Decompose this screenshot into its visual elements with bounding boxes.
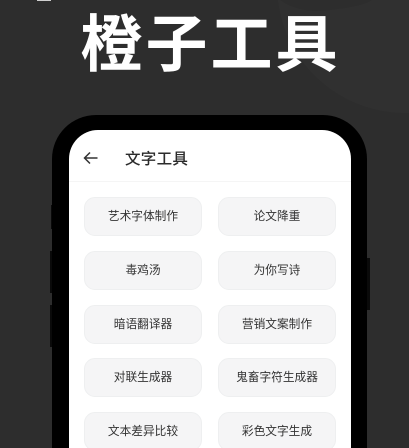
tool button: 论文降重 <box>218 197 336 236</box>
phone side buttons <box>50 205 370 347</box>
tool button: 对联生成器 <box>84 358 202 397</box>
tool button: 对联生成器: 对联生成器 <box>114 371 172 384</box>
tool button: 论文降重: 论文降重 <box>254 210 300 223</box>
tool button: 文本差异比较 <box>84 412 202 448</box>
tool button: 为你写诗 <box>218 251 336 290</box>
app header <box>69 130 351 182</box>
tool button: 艺术字体制作: 艺术字体制作 <box>108 210 178 223</box>
tool button: 暗语翻译器 <box>84 305 202 344</box>
phone body <box>52 115 367 448</box>
tool button: 营销文案制作 <box>218 305 336 344</box>
icon: back arrow <box>84 152 98 164</box>
tool button: 为你写诗: 为你写诗 <box>254 264 300 277</box>
tool button: 鬼畜字符生成器 <box>218 358 336 397</box>
tool button: 彩色文字生成 <box>218 412 336 448</box>
title: 橙子工具 <box>80 11 341 80</box>
phone mockup <box>50 115 370 448</box>
tool button: 文本差异比较: 文本差异比较 <box>108 425 178 438</box>
top edge fragment <box>37 0 51 1</box>
phone screen <box>69 130 351 448</box>
tool button: 毒鸡汤 <box>84 251 202 290</box>
header title: 文字工具 <box>125 151 188 168</box>
tool button: 艺术字体制作 <box>84 197 202 236</box>
tool button: 营销文案制作: 营销文案制作 <box>242 318 312 331</box>
tool button: 暗语翻译器: 暗语翻译器 <box>114 318 172 331</box>
tool button: 鬼畜字符生成器: 鬼畜字符生成器 <box>236 371 318 384</box>
tool button: 彩色文字生成: 彩色文字生成 <box>242 425 312 438</box>
tool button: 毒鸡汤: 毒鸡汤 <box>125 264 161 277</box>
